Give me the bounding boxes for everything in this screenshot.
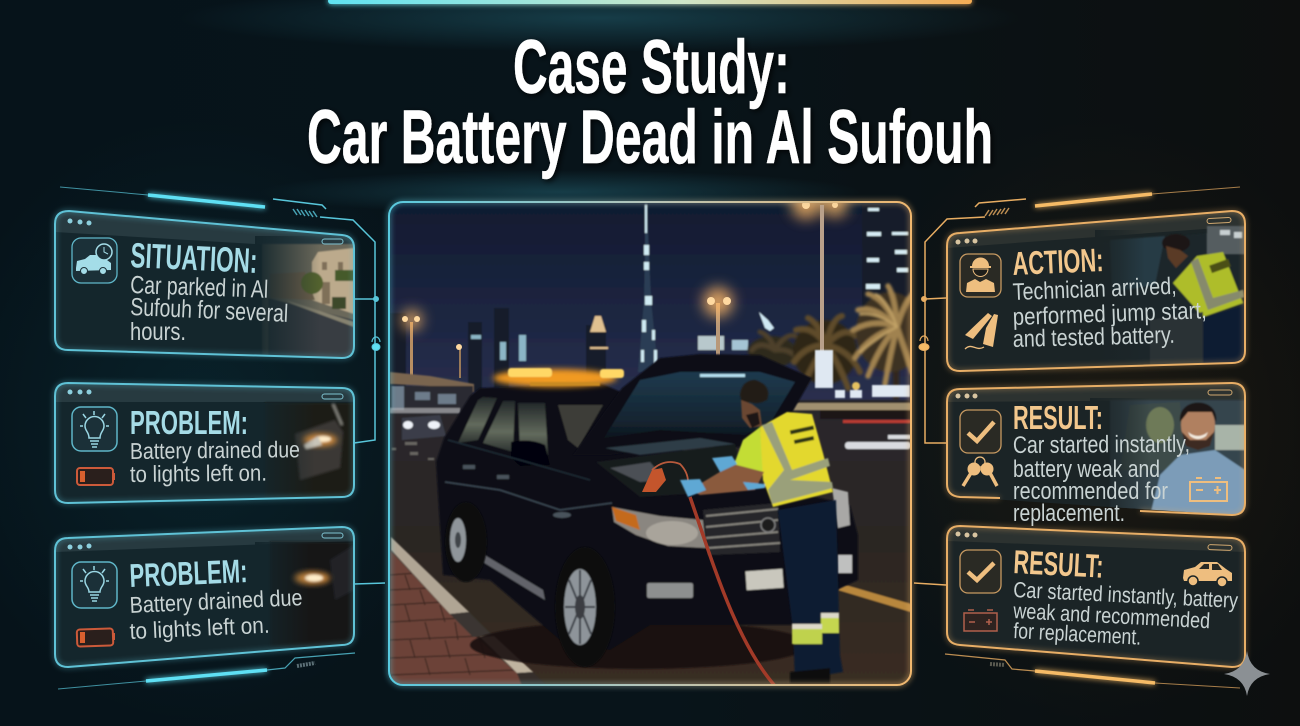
brick pavement and curb — [390, 537, 547, 686]
headlight night photo — [270, 542, 355, 647]
central photo: technician jump-starting SUV at night in Dubai — [388, 189, 924, 690]
lamp pole and billboard — [815, 205, 833, 388]
result text — [1013, 399, 1190, 527]
problem text: PROBLEM: — [130, 404, 248, 441]
window dots and pill — [956, 532, 1232, 550]
window dots and pill — [956, 217, 1231, 244]
top glowing bar — [328, 0, 972, 4]
action text: performed jump start, — [1012, 297, 1207, 331]
situation text: SITUATION: — [130, 236, 258, 281]
action text: Technician arrived, — [1012, 273, 1177, 306]
icon: check mark — [960, 410, 1001, 453]
situation street photo — [262, 244, 357, 359]
car wheels — [445, 502, 615, 667]
panel: result 2 — [947, 526, 1245, 667]
situation text: Sufouh for several — [130, 293, 289, 328]
problem text: PROBLEM: — [129, 552, 248, 594]
street lamps — [402, 189, 848, 382]
panel: problem 2 — [55, 527, 355, 667]
photo border — [389, 202, 911, 685]
title: Case Study: — [513, 25, 790, 110]
headlight photo — [265, 403, 355, 499]
window dots and pill — [956, 390, 1232, 398]
problem text: to lights left on. — [129, 612, 270, 644]
icon: car — [1183, 562, 1232, 587]
title — [307, 25, 993, 180]
icon: car with clock — [72, 238, 117, 283]
panel: situation — [55, 211, 357, 361]
red clamp on battery — [642, 462, 688, 492]
icon: low battery — [77, 628, 115, 647]
result text: weak and recommended — [1012, 598, 1211, 633]
window dots and pill — [68, 218, 343, 244]
window dots and pill — [68, 390, 343, 399]
problem text — [129, 552, 303, 644]
icon: battery — [964, 610, 997, 631]
problem text — [130, 404, 300, 487]
action text: and tested battery. — [1012, 322, 1175, 353]
result text: RESULT: — [1013, 399, 1103, 436]
icon: car keys — [963, 457, 997, 486]
situation text: hours. — [130, 318, 186, 346]
problem text: Battery drained due — [130, 436, 300, 464]
situation text: Car parked in Al — [130, 271, 269, 304]
car body — [436, 383, 858, 669]
panel: action — [947, 211, 1247, 371]
icon: technician — [960, 254, 1001, 297]
icon: low battery — [77, 468, 115, 485]
action text: ACTION: — [1012, 241, 1104, 282]
smiling customer photo — [1110, 400, 1246, 516]
icon: battery — [1190, 478, 1227, 501]
technician photo — [1112, 226, 1244, 364]
problem text: to lights left on. — [130, 460, 267, 487]
panel: result 1 — [947, 383, 1246, 527]
panel: problem 1 — [55, 383, 355, 503]
result text: replacement. — [1013, 500, 1125, 527]
result text: Car started instantly, — [1013, 431, 1190, 459]
result text: recommended for — [1013, 478, 1168, 505]
left circuit decoration — [58, 187, 385, 689]
open hood and amber beacon — [493, 354, 812, 497]
road and distant traffic — [388, 372, 912, 690]
situation text — [130, 236, 289, 346]
result text — [1012, 543, 1239, 650]
icon: check mark — [960, 550, 1001, 593]
right circuit decoration — [914, 187, 1240, 688]
photo sky and skyline — [390, 202, 912, 417]
icon: light bulb — [72, 562, 117, 608]
window dots and pill — [68, 533, 343, 550]
technician — [680, 380, 843, 683]
result text: Car started instantly, battery — [1013, 577, 1239, 613]
jump cable — [690, 497, 775, 686]
icon: jumper clamp — [965, 313, 998, 349]
result text: battery weak and — [1013, 456, 1160, 483]
problem text: Battery drained due — [129, 584, 303, 618]
action text — [1012, 241, 1207, 353]
icon: sparkle watermark — [1224, 651, 1270, 696]
result text: RESULT: — [1013, 543, 1104, 585]
result text: for replacement. — [1013, 618, 1142, 650]
palm trees — [748, 286, 924, 400]
icon: light bulb — [72, 407, 117, 451]
